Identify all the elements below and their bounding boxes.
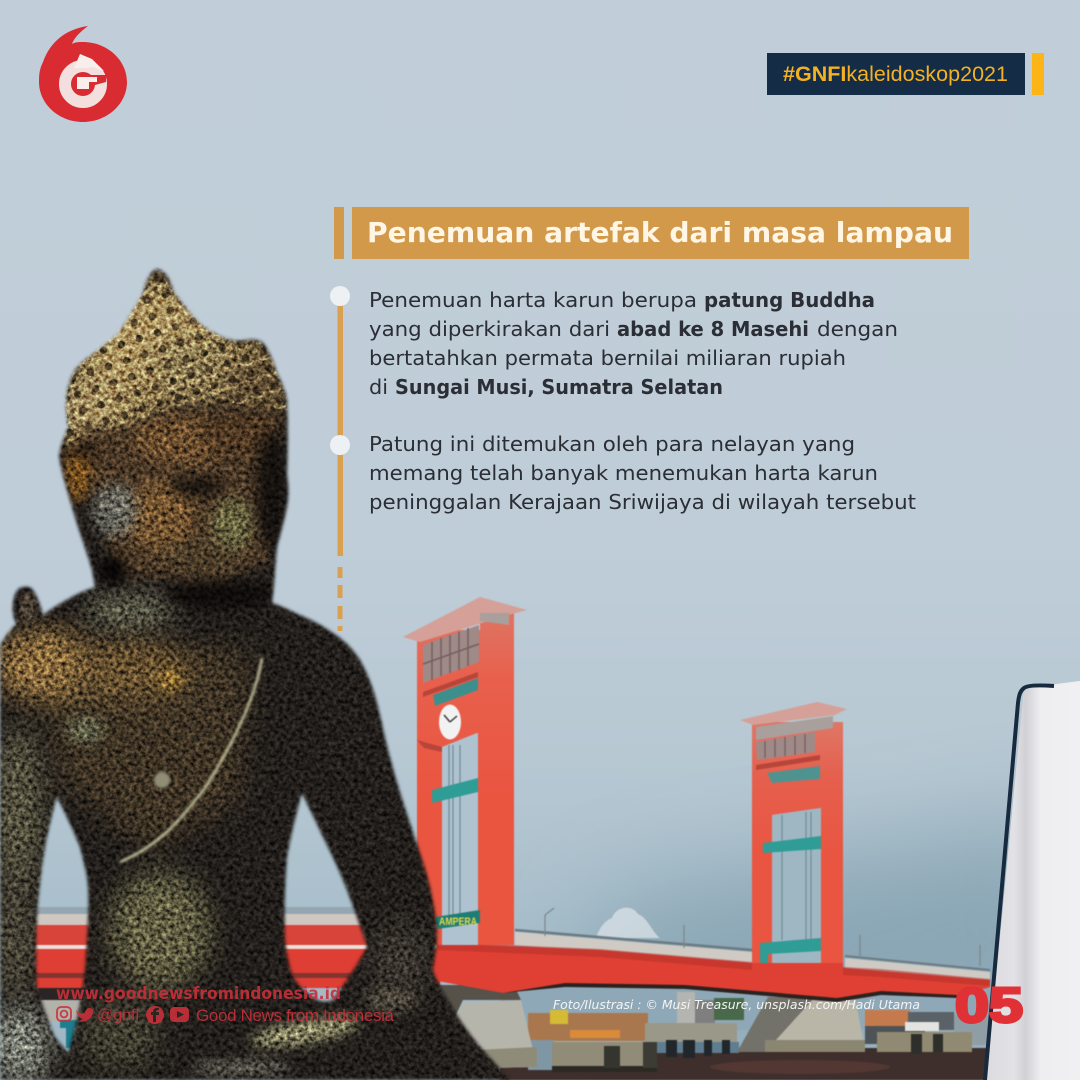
photo: Ampera bridge over the Musi River: [30, 597, 1080, 1080]
paragraph 1: [369, 288, 898, 399]
road behind deck: [515, 930, 990, 982]
logo emblem: [65, 54, 106, 102]
barge left: [552, 1042, 657, 1072]
tower 2 window sky: [772, 808, 821, 968]
Ampera sign: [435, 910, 480, 929]
tower 1 cables: [449, 745, 460, 920]
hair: [60, 269, 288, 454]
icon: youtube: [170, 1007, 189, 1022]
paragraph 1: di: [369, 375, 388, 399]
pier left: [432, 985, 537, 1068]
head: [50, 260, 300, 609]
paragraph 2: peninggalan Kerajaan Sriwijaya di wilayah tersebut: [369, 490, 916, 514]
barge right: [877, 1032, 972, 1054]
metal texture: [0, 260, 520, 1080]
water: [500, 1040, 990, 1080]
paragraph 1: Penemuan harta karun berupa: [369, 288, 697, 312]
lamp posts: [545, 908, 980, 966]
tower 1 teal sign: [433, 678, 478, 706]
tower 2 teal bar: [763, 836, 821, 853]
paragraph 2: Patung ini ditemukan oleh para nelayan yang: [369, 432, 855, 456]
tower 2 cables: [782, 812, 811, 940]
paragraph 2: [369, 432, 916, 514]
tower 1 right leg: [480, 612, 514, 945]
deck shading: [437, 942, 990, 986]
hashtag tag: [767, 53, 1025, 95]
tower 2 teal panel: [767, 766, 820, 783]
brand name: Good News from Indonesia: [196, 1006, 395, 1025]
icon: twitter: [76, 1008, 94, 1022]
deck shadow: [503, 983, 957, 1002]
title: Penemuan artefak dari masa lampau: [367, 216, 953, 249]
paragraph 1: yang diperkirakan dari: [369, 317, 610, 341]
tower 1 grille: [423, 613, 509, 683]
sky tint: [560, 820, 1080, 1030]
tower 1: [403, 597, 527, 945]
timeline: [330, 286, 350, 631]
paragraph 1: bertatahkan permata bernilai miliaran rupiah: [369, 346, 846, 370]
timeline dot 2: [330, 435, 350, 455]
notebook pages: [986, 681, 1080, 1080]
tower 2 teal base: [760, 938, 821, 965]
website: www.goodnewsfromindonesia.id: [56, 984, 341, 1004]
logo mark: [39, 26, 127, 122]
paragraph 1: abad ke 8 Masehi: [617, 317, 809, 341]
logo: [39, 26, 127, 122]
paragraph 2: memang telah banyak menemukan harta karun: [369, 461, 878, 485]
bridge deck: [432, 943, 990, 1000]
page number: 05: [955, 979, 1023, 1033]
tower 2 grille: [756, 716, 833, 760]
clock: [439, 704, 461, 740]
under-arch sky: [500, 985, 990, 1030]
accent bar: [1032, 53, 1044, 95]
left approach road: [30, 907, 440, 1048]
tower 2 roof: [740, 702, 847, 725]
tower 2: [740, 702, 847, 975]
tower 1 window sky: [442, 733, 478, 945]
chest detail: [154, 772, 170, 788]
notebook: [985, 681, 1080, 1080]
pier right: [737, 997, 865, 1052]
Ampera sign: AMPERA: [439, 916, 477, 928]
hashtag tag: #GNFIkaleidoskop2021: [783, 62, 1008, 86]
cloud: [596, 908, 660, 938]
icon: facebook: [146, 1006, 164, 1024]
handle: @gnfi: [97, 1007, 139, 1024]
bronze ear knob: [19, 592, 37, 624]
far bank and town: [528, 992, 988, 1045]
necklace line: [120, 658, 262, 862]
website and social media: [56, 984, 395, 1025]
face: [66, 407, 284, 609]
timeline dot 1: [330, 286, 350, 306]
icon: instagram: [57, 1007, 71, 1021]
Buddha statue: [0, 260, 520, 1080]
photo credit: Foto/Ilustrasi : © Musi Treasure, unsplash.com/Hadi Utama: [553, 998, 920, 1012]
tower 1 teal bar: [432, 778, 478, 803]
paragraph 1: Sungai Musi, Sumatra Selatan: [395, 375, 723, 399]
tower 1 roof: [403, 597, 527, 642]
mooring posts: [666, 1040, 730, 1058]
notebook cover edge: [985, 685, 1054, 1080]
paragraph 1: dengan: [817, 317, 898, 341]
paragraph 1: patung Buddha: [704, 288, 875, 312]
title: [334, 207, 969, 259]
